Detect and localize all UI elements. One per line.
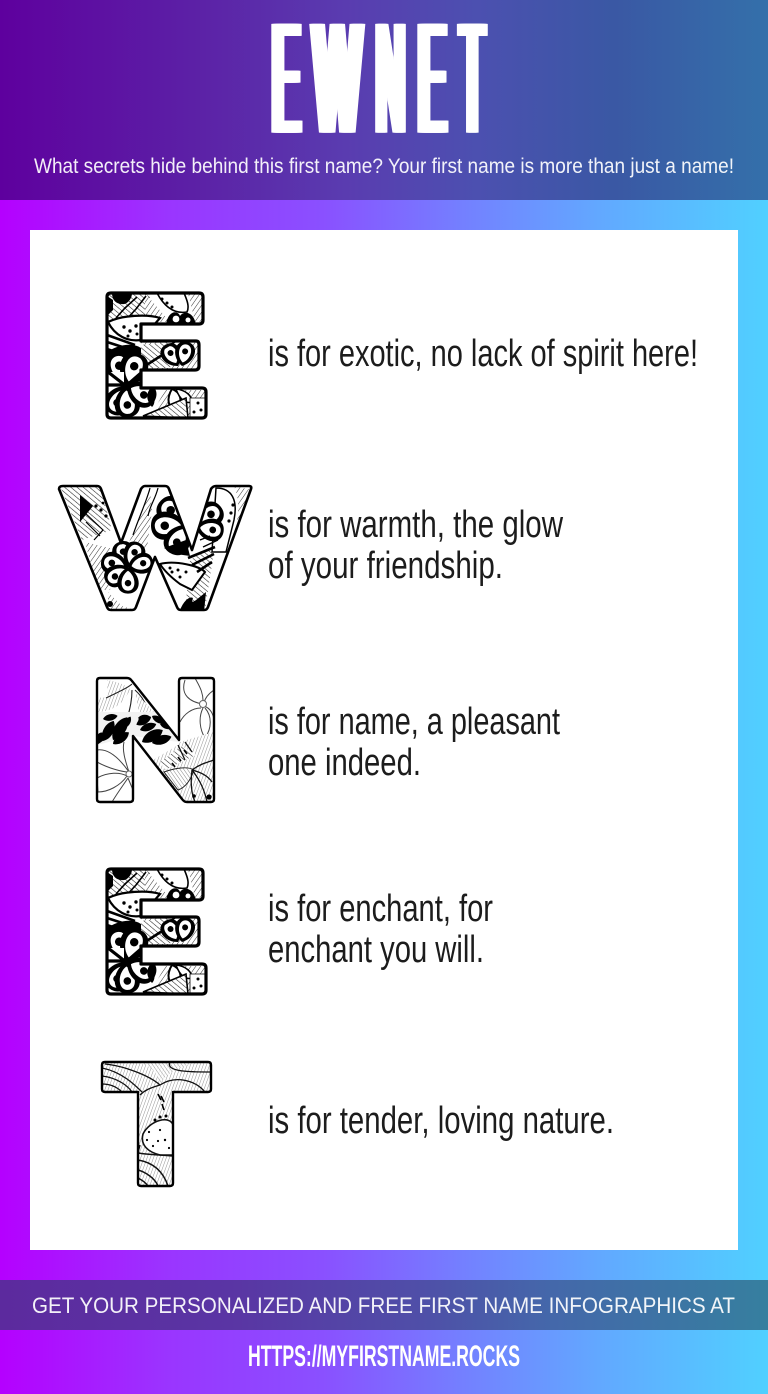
text: N lines: is for name, a pleasant (268, 701, 560, 743)
footer call to action: GET YOUR PERSONALIZED AND FREE FIRST NAME INFOGRAPHICS AT (32, 1293, 735, 1318)
white content panel (30, 230, 738, 1250)
letter T illustration (100, 1060, 213, 1188)
text: N lines (268, 701, 560, 784)
footer band (0, 1280, 768, 1330)
artwork and text layer (33, 158, 734, 1367)
letter W illustration (58, 484, 254, 612)
letter N illustration (95, 676, 216, 804)
text: second E lines: enchant you will. (268, 929, 484, 971)
header band (0, 0, 768, 200)
text: second E lines: is for enchant, for (268, 888, 493, 930)
text: N lines: one indeed. (268, 742, 421, 784)
text: W lines: of your friendship. (268, 545, 503, 587)
second letter E illustration (100, 866, 209, 996)
footer url: HTTPS://MYFIRSTNAME.ROCKS (248, 1340, 520, 1373)
text: second E lines (268, 888, 493, 971)
text: T line: is for tender, loving nature. (268, 1100, 614, 1142)
title (268, 0, 488, 166)
letter E illustration (100, 290, 209, 420)
text: W lines: is for warmth, the glow (268, 504, 563, 546)
text: W lines (268, 504, 563, 587)
